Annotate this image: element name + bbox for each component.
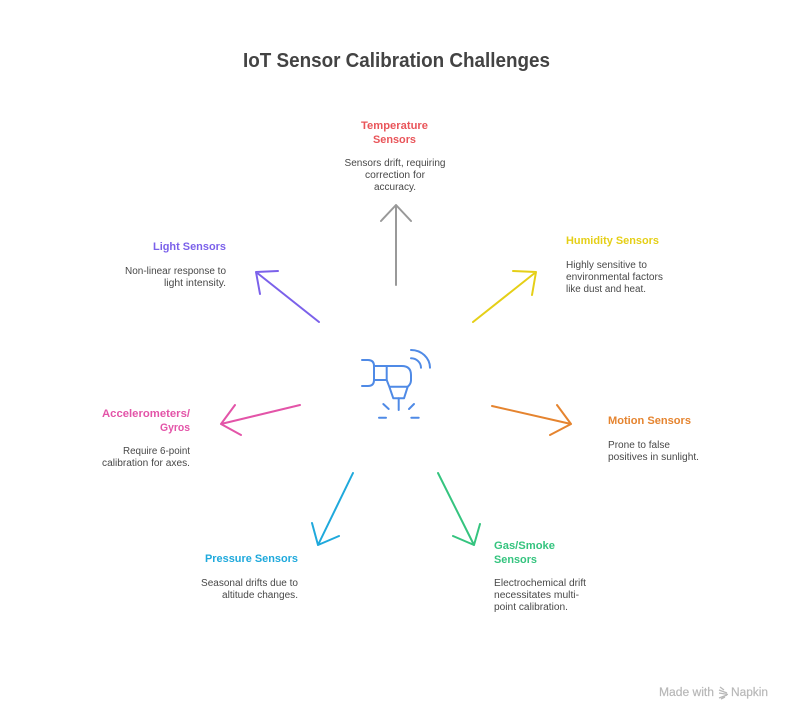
text: pressure sensors: Pressure Sensors xyxy=(205,553,298,565)
text: humidity sensors: Highly sensitive to xyxy=(566,260,647,271)
central icon: sensor with signal xyxy=(362,350,430,418)
text: motion sensors: Motion Sensors xyxy=(608,415,691,427)
text: accelerometers/gyros: Require 6-point xyxy=(123,446,190,457)
text: temperature sensors: Sensors drift, requiring xyxy=(344,158,446,169)
arrow: accelerometers xyxy=(221,405,300,435)
text: accelerometers/gyros: calibration for axes. xyxy=(102,458,190,469)
text: light sensors: Non-linear response to xyxy=(125,266,226,277)
text: pressure sensors: altitude changes. xyxy=(222,590,298,601)
text: humidity sensors: environmental factors xyxy=(566,272,663,283)
text: gas/smoke sensors: necessitates multi- xyxy=(494,590,579,601)
text: accelerometers/gyros: Gyros xyxy=(160,422,190,434)
text: temperature sensors: Sensors xyxy=(373,134,416,146)
text: humidity sensors: like dust and heat. xyxy=(566,284,646,295)
text: gas/smoke sensors: Gas/Smoke xyxy=(494,540,555,552)
text: accelerometers/gyros: Accelerometers/ xyxy=(102,408,190,420)
text: pressure sensors xyxy=(201,553,298,601)
text: temperature sensors: Temperature xyxy=(361,120,428,132)
text: light sensors: light intensity. xyxy=(164,278,226,289)
text: motion sensors: positives in sunlight. xyxy=(608,452,699,463)
text: gas/smoke sensors xyxy=(494,540,586,613)
arrow: gas/smoke xyxy=(438,473,480,545)
arrow: temperature xyxy=(381,205,411,285)
text: temperature sensors xyxy=(344,120,446,193)
watermark: made with napkin: Napkin xyxy=(731,687,768,699)
arrow: pressure xyxy=(312,473,353,545)
icon: napkin logo xyxy=(719,687,728,699)
text: humidity sensors: Humidity Sensors xyxy=(566,235,659,247)
text: motion sensors: Prone to false xyxy=(608,440,670,451)
text: gas/smoke sensors: Sensors xyxy=(494,554,537,566)
arrow: motion xyxy=(492,405,571,435)
arrow: humidity xyxy=(473,271,536,322)
text: pressure sensors: Seasonal drifts due to xyxy=(201,578,298,589)
text: humidity sensors xyxy=(566,235,663,295)
text: light sensors: Light Sensors xyxy=(153,241,226,253)
watermark: made with napkin: Made with xyxy=(659,687,714,699)
text: accelerometers/gyros xyxy=(102,408,190,469)
title: IoT Sensor Calibration Challenges xyxy=(243,50,550,72)
text: gas/smoke sensors: point calibration. xyxy=(494,602,568,613)
text: gas/smoke sensors: Electrochemical drift xyxy=(494,578,586,589)
watermark: made with napkin xyxy=(659,687,768,699)
text: temperature sensors: correction for xyxy=(365,170,426,181)
arrow: light xyxy=(256,271,319,322)
text: motion sensors xyxy=(608,415,699,463)
text: temperature sensors: accuracy. xyxy=(374,182,416,193)
text: light sensors xyxy=(125,241,226,289)
